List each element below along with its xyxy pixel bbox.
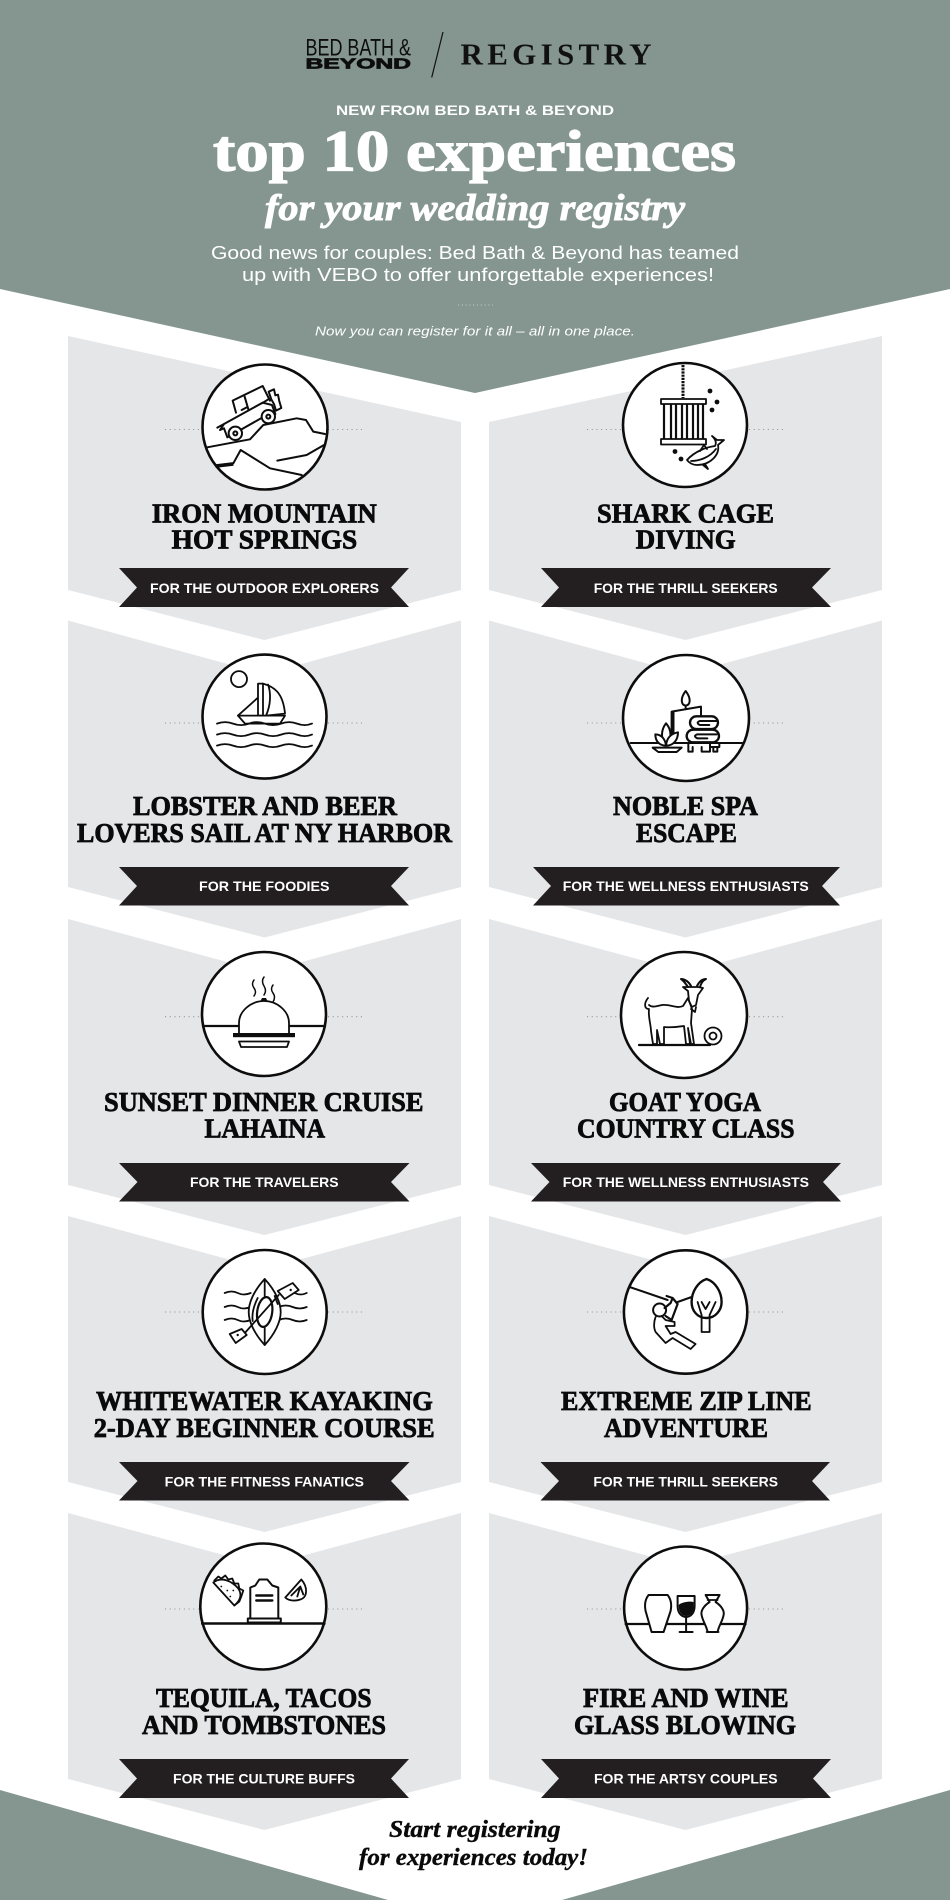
icon: spa candle and towels [623, 655, 749, 781]
heading: COUNTRY CLASS [577, 1114, 794, 1144]
ribbon: artsy couples [541, 1759, 831, 1798]
panel: header banner [0, 0, 950, 393]
panel: Iron Mountain Hot Springs [68, 336, 461, 640]
heading [613, 791, 758, 848]
panel: Shark Cage Diving [489, 336, 882, 640]
logo: Bed Bath & Beyond [306, 34, 411, 72]
icon: sailboat [202, 655, 326, 779]
call to action [359, 1817, 588, 1871]
ribbon: wellness enthusiasts [531, 1163, 841, 1202]
heading [152, 498, 377, 554]
icon: taco, tombstone and lime [200, 1544, 326, 1670]
heading [94, 1386, 435, 1443]
ribbon: wellness enthusiasts [533, 867, 840, 906]
ribbon: foodies [119, 867, 409, 906]
panel: Tequila, Tacos and Tombstones [68, 1513, 461, 1830]
subtitle: for your wedding registry [265, 188, 686, 229]
heading: 2-DAY BEGINNER COURSE [94, 1413, 435, 1443]
logo: Registry: REGISTRY [460, 36, 652, 72]
heading [597, 498, 774, 554]
heading: LAHAINA [204, 1114, 325, 1144]
ribbon: foodies: FOR THE FOODIES [199, 878, 330, 894]
heading: WHITEWATER KAYAKING [96, 1386, 433, 1416]
intro text: Good news for couples: Bed Bath & Beyond has teamed [211, 243, 739, 263]
ribbon: thrill seekers [540, 1462, 830, 1500]
icon: jeep on mountain [202, 364, 328, 490]
heading: NOBLE SPA [613, 791, 758, 821]
ribbon: thrill seekers: FOR THE THRILL SEEKERS [593, 1474, 778, 1490]
logo: Bed Bath & Beyond: BED BATH & [306, 34, 411, 62]
tagline: Now you can register for it all – all in one place. [315, 324, 635, 338]
heading: IRON MOUNTAIN [152, 498, 377, 528]
icon: vases and wine glass [624, 1546, 747, 1670]
heading: ESCAPE [636, 818, 737, 848]
heading: GOAT YOGA [609, 1087, 761, 1117]
ribbon: fitness fanatics [119, 1462, 410, 1500]
heading: LOBSTER AND BEER [133, 791, 397, 821]
heading: AND TOMBSTONES [142, 1710, 386, 1740]
heading: FIRE AND WINE [583, 1683, 788, 1713]
eyebrow text: NEW FROM BED BATH & BEYOND [336, 102, 614, 118]
ribbon: thrill seekers [541, 568, 831, 607]
call to action: Start registering [389, 1817, 560, 1843]
logo: Bed Bath & Beyond: BEYOND [306, 56, 411, 72]
ribbon: travelers: FOR THE TRAVELERS [190, 1174, 338, 1190]
panel: Sunset Dinner Cruise Lahaina [68, 919, 461, 1235]
call to action: for experiences today! [359, 1845, 588, 1871]
ribbon: travelers [119, 1163, 410, 1202]
heading: ADVENTURE [604, 1413, 768, 1443]
ribbon: wellness enthusiasts: FOR THE WELLNESS ENTHUSIASTS [563, 878, 809, 894]
panel: Noble Spa Escape [489, 620, 882, 938]
ribbon: fitness fanatics: FOR THE FITNESS FANATICS [165, 1474, 364, 1490]
panel: Fire and Wine Glass Blowing [489, 1513, 882, 1830]
icon: dinner cloche at sunset [202, 952, 326, 1076]
icon: kayak and paddle [203, 1250, 327, 1374]
heading: LOVERS SAIL AT NY HARBOR [77, 818, 452, 848]
ribbon: wellness enthusiasts: FOR THE WELLNESS ENTHUSIASTS [563, 1174, 809, 1190]
ribbon: thrill seekers: FOR THE THRILL SEEKERS [594, 580, 778, 596]
heading: GLASS BLOWING [574, 1710, 796, 1740]
logo divider slash [432, 32, 443, 78]
icon: shark cage [623, 363, 747, 487]
intro text: up with VEBO to offer unforgettable experiences! [242, 265, 714, 285]
footer chevron: left [0, 1790, 388, 1900]
ribbon: outdoor explorers [119, 568, 409, 607]
panel: Goat Yoga Country Class [489, 919, 882, 1235]
heading [77, 791, 452, 848]
heading [574, 1683, 796, 1740]
panel: Whitewater Kayaking [68, 1216, 461, 1532]
heading: EXTREME ZIP LINE [561, 1386, 812, 1416]
heading [577, 1087, 794, 1144]
panel: Lobster and Beer Lovers Sail [68, 620, 461, 938]
icon: zip line and tree [624, 1250, 747, 1374]
heading: HOT SPRINGS [172, 524, 357, 554]
heading [104, 1087, 424, 1144]
heading: SUNSET DINNER CRUISE [104, 1087, 424, 1117]
ribbon: outdoor explorers: FOR THE OUTDOOR EXPLORERS [150, 580, 379, 596]
heading: SHARK CAGE [597, 498, 774, 528]
main title: top 10 experiences [213, 118, 736, 184]
icon: goat and yoga mat [621, 952, 747, 1078]
intro text [211, 243, 739, 285]
heading [142, 1683, 386, 1740]
ribbon: culture buffs [119, 1759, 409, 1798]
panel: Extreme Zip Line Adventure [489, 1216, 882, 1532]
ribbon: artsy couples: FOR THE ARTSY COUPLES [594, 1770, 778, 1786]
heading: TEQUILA, TACOS [156, 1683, 372, 1713]
heading: DIVING [636, 524, 736, 554]
ribbon: culture buffs: FOR THE CULTURE BUFFS [173, 1770, 355, 1786]
heading [561, 1386, 812, 1443]
footer chevron: right [562, 1790, 950, 1900]
